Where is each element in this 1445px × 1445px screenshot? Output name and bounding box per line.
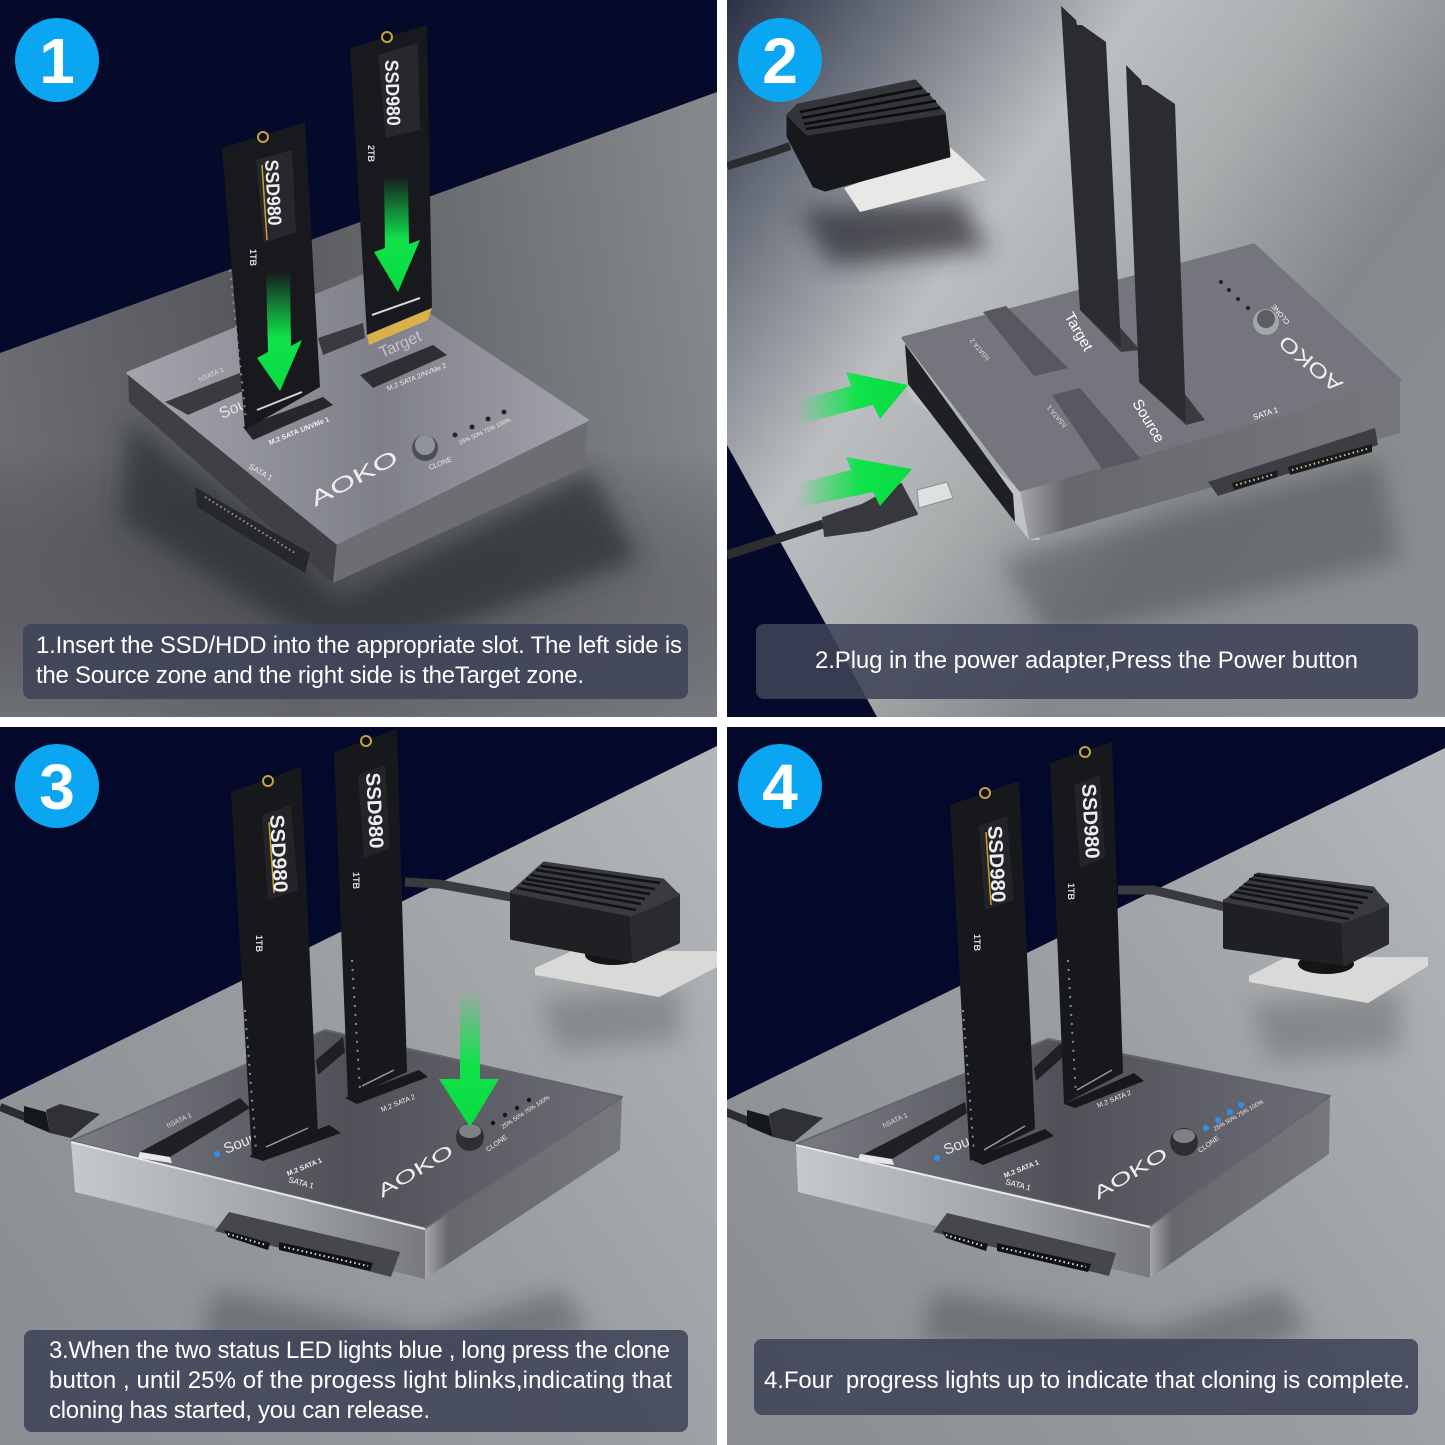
badge 2: 2 — [762, 25, 798, 97]
dock 1: Source — [217, 386, 270, 423]
panel 2: plug in power — [727, 0, 1445, 717]
dock 3: Source — [221, 1124, 272, 1158]
SSD right: 2TB — [366, 145, 376, 163]
SSD left: 1TB — [248, 249, 258, 267]
dock 3: 25% 50% 75% 100% — [501, 1095, 552, 1131]
dock 1: AOKO — [307, 446, 402, 511]
badge 1 — [15, 18, 99, 102]
green arrow top — [796, 372, 908, 425]
dock 3: M.2 SATA 2 — [380, 1094, 417, 1114]
caption 1: the Source zone and the right side is theTarget zone. — [36, 662, 584, 689]
clone button — [412, 435, 438, 461]
dock 4: CLONE — [1197, 1135, 1221, 1155]
badge 3: 3 — [39, 751, 75, 823]
clone button 4 — [1170, 1128, 1198, 1156]
SATA connector 4 — [933, 1213, 1116, 1276]
dock 4: AOKO — [1090, 1144, 1171, 1203]
dock 1: SATA 1 — [247, 462, 274, 483]
SSD right — [350, 25, 432, 345]
SSD 4 right — [1050, 742, 1123, 1104]
caption 3 — [24, 1330, 688, 1432]
arrow left — [257, 272, 302, 391]
SSD right: SSD980 — [380, 59, 403, 126]
dock 1: 25% 50% 75% 100% — [458, 417, 513, 447]
SSD 3 right — [334, 729, 407, 1099]
dock 1: M.2 SATA 1/NVMe 1 — [268, 416, 331, 447]
SSD 2 tall — [1061, 6, 1121, 348]
cable plug 3 — [0, 1104, 100, 1138]
dock 4: SATA 1 — [1004, 1177, 1032, 1193]
dock 4: M.2 SATA 2 — [1096, 1090, 1133, 1110]
dock 2: hSATA 2 — [969, 336, 992, 361]
SSD 4 left: SSD980 — [983, 825, 1009, 903]
badge 4 — [738, 744, 822, 828]
SSD 3 right: SSD980 — [361, 772, 387, 849]
adapter 4 — [1118, 874, 1428, 1003]
panel 1: insert the drives — [0, 0, 717, 717]
power adapter 2 — [727, 81, 986, 212]
SSD left: SSD980 — [260, 159, 284, 226]
SSD 3 left: SSD980 — [265, 814, 291, 893]
dock 2: SATA 1 — [1252, 405, 1280, 422]
dock 4: 25% 50% 75% 100% — [1213, 1099, 1265, 1133]
caption 4: 4.Four progress lights up to indicate that cloning is complete. — [764, 1367, 1410, 1394]
badge 2 — [738, 18, 822, 102]
cable plug 4 — [723, 1108, 823, 1142]
dock 4: hSATA 1 — [882, 1112, 909, 1130]
SATA connector — [1208, 428, 1378, 496]
dock 3: M.2 SATA 1 — [286, 1157, 323, 1178]
adapter 3 — [405, 863, 717, 997]
dock 4: M.2 SATA 1 — [1003, 1159, 1040, 1180]
panel 3: press clone — [0, 727, 717, 1445]
dock 2: CLONE — [1270, 302, 1292, 325]
dock 1 — [128, 274, 587, 583]
caption 3: cloning has started, you can release. — [49, 1397, 430, 1424]
dock 3: hSATA 1 — [166, 1112, 193, 1130]
clone button 3 — [456, 1123, 484, 1151]
dock 3: AOKO — [374, 1141, 457, 1201]
SSD 4 right: 1TB — [1066, 883, 1076, 901]
dock 3: SATA 1 — [287, 1175, 315, 1191]
plug cable — [727, 482, 953, 555]
dock 3: CLONE — [485, 1134, 509, 1154]
dock 2 — [903, 245, 1400, 540]
caption 3: 3.When the two status LED lights blue , long press the clone — [49, 1337, 670, 1364]
badge 3 — [15, 744, 99, 828]
dock 1: M.2 SATA 2/NVMe 2 — [386, 363, 448, 393]
dock 2: hSATA 1 — [1046, 403, 1069, 428]
dock 4 — [723, 1039, 1330, 1278]
caption 2: 2.Plug in the power adapter,Press the Power button — [815, 647, 1358, 674]
dock 2: Target — [1061, 310, 1097, 355]
dock 3 — [0, 1030, 622, 1279]
SSD 4 right: SSD980 — [1077, 783, 1103, 859]
badge 1: 1 — [39, 25, 75, 97]
SSD 3 left — [231, 767, 318, 1158]
badge 4: 4 — [762, 751, 798, 823]
caption 3: button , until 25% of the progess light blinks,indicating that — [49, 1367, 672, 1394]
SSD 3 right: 1TB — [351, 872, 361, 890]
SSD 2 short — [1126, 65, 1186, 423]
green arrow bottom — [796, 457, 912, 508]
caption 2 — [756, 624, 1418, 699]
caption 1 — [23, 624, 688, 699]
panel 4: cloning complete — [723, 727, 1445, 1445]
dock 2: Source — [1129, 396, 1168, 446]
dock 1: CLONE — [428, 456, 453, 472]
SSD 4 left — [950, 781, 1035, 1161]
SSD 3 left: 1TB — [254, 935, 264, 953]
SATA connector 3 — [215, 1212, 400, 1277]
dock 1: Target — [377, 328, 425, 362]
dock 2: AOKO — [1275, 330, 1347, 396]
caption 1: 1.Insert the SSD/HDD into the appropriate slot. The left side is — [36, 632, 682, 659]
arrow 3 — [439, 989, 499, 1127]
caption 4 — [754, 1339, 1418, 1415]
dock 1: hSATA 1 — [198, 367, 225, 384]
SSD 4 left: 1TB — [972, 934, 982, 952]
arrow right — [374, 176, 420, 292]
dock 4: Source — [941, 1125, 992, 1159]
SSD left — [222, 122, 320, 430]
